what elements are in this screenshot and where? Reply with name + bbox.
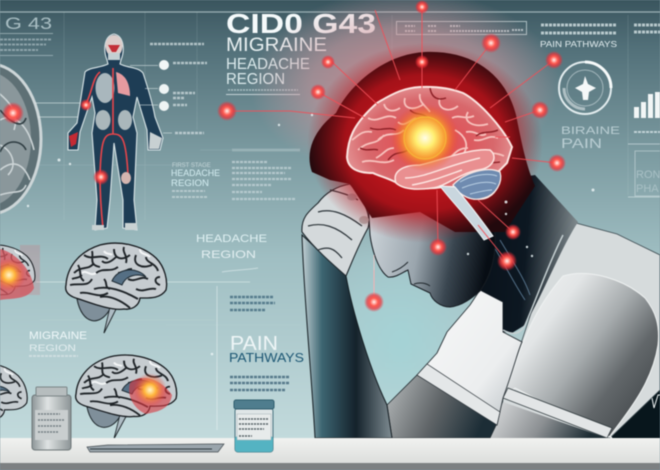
brain stem (440, 186, 493, 240)
label: headache region lower (196, 233, 267, 272)
label: headache region small: HEADACHE (171, 168, 220, 179)
face (368, 200, 495, 307)
label: migraine region (29, 330, 87, 356)
icon: circular pain gauge (559, 62, 611, 114)
table (0, 438, 660, 470)
left heading: G 43 (0, 14, 53, 56)
shirt front (417, 290, 522, 425)
label: headache region small: REGION (171, 178, 209, 189)
right arm (490, 402, 607, 438)
brain: grey, top (66, 243, 167, 333)
label: headache region small: FIRST STAGE (172, 163, 211, 169)
bar chart (634, 92, 660, 118)
main title: REGION (226, 71, 285, 88)
person (302, 43, 660, 438)
brain: highlighted, bottom (76, 355, 177, 439)
main title: MIGRAINE (226, 35, 327, 56)
label: biraine pain (561, 125, 620, 151)
label: headache region lower: REGION (201, 249, 256, 261)
cerebellum (453, 170, 501, 199)
brain: grey, bottom left (0, 363, 27, 440)
sparkles (27, 114, 595, 355)
red glow in hair (307, 43, 543, 243)
brain: red, left (0, 245, 40, 312)
pain rays (227, 7, 557, 302)
left sleeve cuff (417, 364, 500, 425)
big shoulder sleeve (503, 273, 658, 438)
scan of brain in head (0, 64, 85, 214)
label: pain pathways: PATHWAYS (229, 351, 304, 365)
hair (309, 52, 535, 232)
jar right (234, 400, 274, 452)
neck (445, 175, 578, 333)
label: headache region lower: HEADACHE (196, 233, 267, 245)
nose and lip shading (392, 262, 430, 286)
top right pain pathways box (396, 22, 660, 49)
ray to lower face (373, 255, 375, 302)
bottle left (32, 387, 71, 450)
light teal wash (310, 230, 490, 450)
label: migraine region: MIGRAINE (29, 330, 87, 342)
raised arm (302, 235, 392, 438)
core glow (391, 104, 459, 172)
label: pain pathways (229, 297, 304, 390)
sleeve cuff (503, 388, 612, 438)
hand on head (302, 184, 369, 276)
top right pain pathways box: PAIN PATHWAYS (540, 39, 617, 49)
pen on table (87, 444, 224, 452)
main title: HEADACHE (226, 56, 310, 73)
pink haze behind head (250, 0, 560, 180)
human body diagram (68, 34, 163, 230)
shirt back (500, 222, 660, 438)
right framed block (628, 132, 660, 197)
temporal lobe (395, 150, 494, 189)
label: pain pathways: PAIN (230, 333, 278, 355)
brain: glowing (347, 87, 512, 240)
label: biraine pain: PAIN (561, 135, 602, 151)
pain dots (217, 0, 566, 312)
right framed block: PHA (636, 183, 659, 195)
label: migraine region: REGION (29, 343, 76, 354)
left heading: G 43: G 43 (5, 14, 52, 33)
label: biraine pain: BIRAINE (561, 125, 620, 137)
label: headache region small (171, 163, 220, 197)
main title (226, 8, 376, 94)
mid text block (232, 150, 300, 199)
dark background corner with pulse trace (600, 370, 660, 438)
body callouts (130, 44, 207, 133)
neck edge (503, 235, 563, 333)
main title: CID0 G43 (226, 8, 376, 39)
lower arm (387, 375, 497, 438)
right framed block: RON (636, 169, 660, 181)
